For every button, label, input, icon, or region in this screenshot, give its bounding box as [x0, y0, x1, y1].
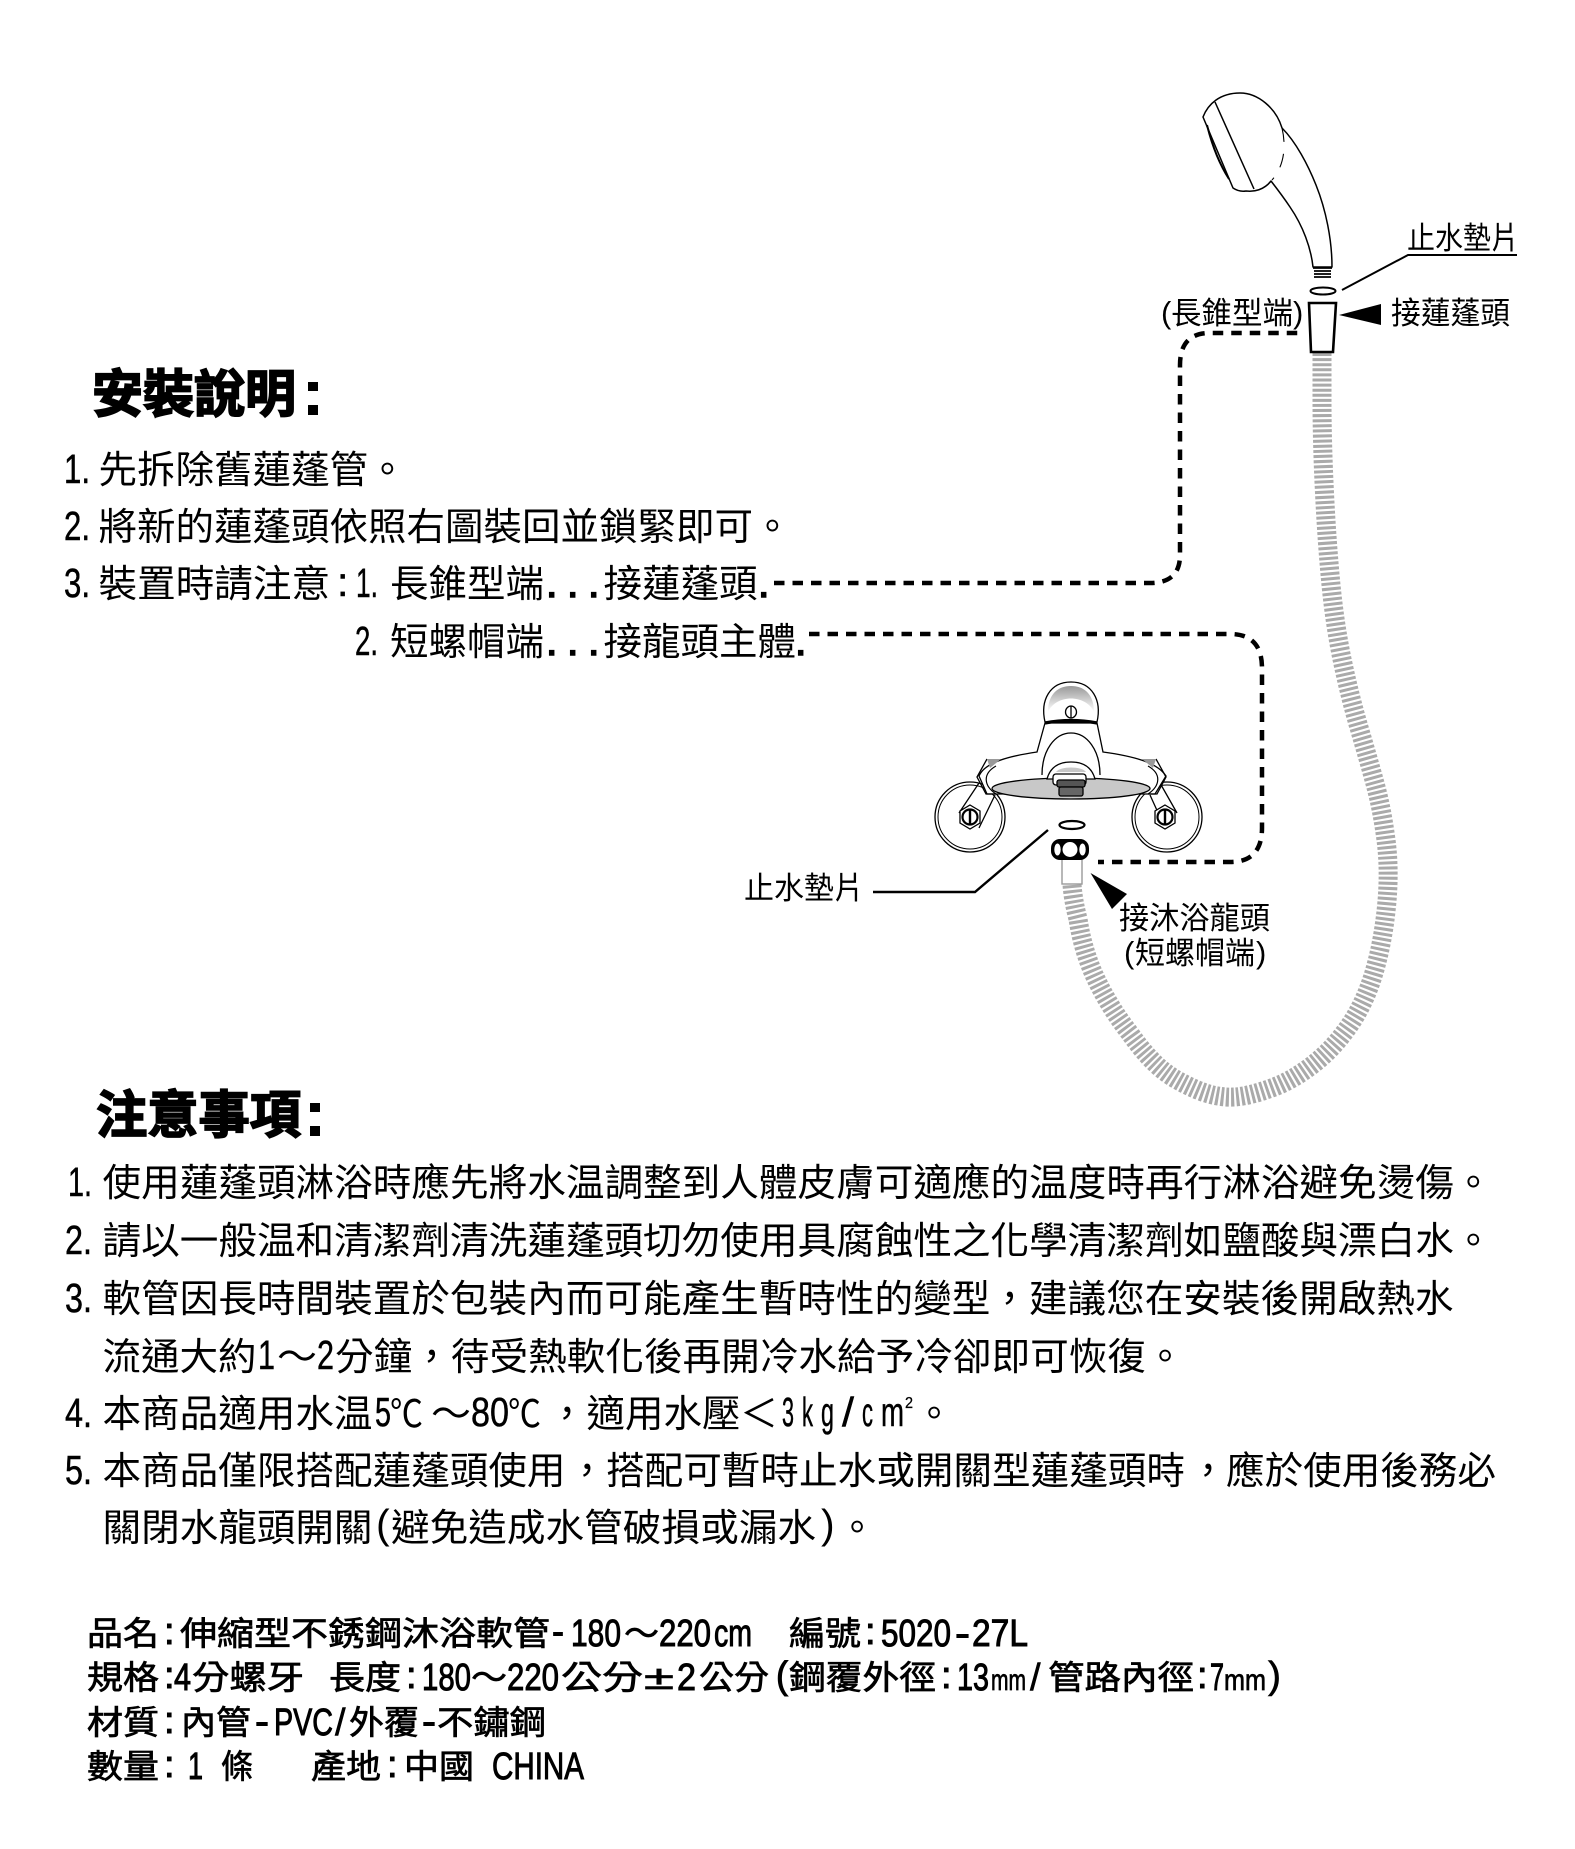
- precaution 4: 2: [905, 1395, 913, 1412]
- spec line: material: [87, 1700, 546, 1744]
- spec line: dimensions: 4: [174, 1657, 191, 1699]
- step 3 long cone end: :: [337, 559, 348, 605]
- precaution 5: ): [821, 1501, 835, 1547]
- precaution 4: 80: [471, 1389, 509, 1435]
- step 3 long cone end: 接蓮蓬頭: [604, 564, 758, 606]
- wheel right: [1132, 782, 1202, 852]
- spec line: dimensions: [87, 1655, 1281, 1699]
- precaution 4: /: [842, 1389, 855, 1435]
- step 3 short nut end: [355, 618, 806, 664]
- precaution 5: 5.: [65, 1447, 92, 1493]
- label: connect bath faucet: 接沐浴龍頭: [1119, 901, 1270, 936]
- spec line: product name and code: cm: [714, 1613, 752, 1655]
- precaution 5: 。: [838, 1508, 876, 1550]
- spec line: dimensions: :: [406, 1655, 417, 1697]
- spec line: dimensions: ～: [471, 1659, 507, 1696]
- spec line: dimensions: 2: [677, 1657, 696, 1699]
- spec line: product name and code: -: [552, 1611, 564, 1653]
- spec line: product name and code: 編號: [789, 1615, 861, 1652]
- precaution 2: 2.: [65, 1217, 92, 1263]
- illustration: short nut connector: [1051, 839, 1089, 884]
- step 3 short nut end: 2.: [355, 618, 378, 664]
- illustration: long cone connector: [1309, 303, 1336, 352]
- text block: precautions: [65, 1159, 1496, 1550]
- spec line: dimensions: 分: [602, 1659, 643, 1696]
- spec line: dimensions: /: [1030, 1657, 1041, 1699]
- spec line: product name and code: 27L: [972, 1613, 1028, 1655]
- precaution 1: 使用蓮蓬頭淋浴時應先將水温調整到人體皮膚可適應的温度時再行淋浴避免燙傷。: [102, 1163, 1492, 1205]
- spec line: product name and code: 伸縮型不銹鋼沐浴軟管: [180, 1615, 550, 1652]
- arrow: to cone connector: [1339, 304, 1381, 325]
- precaution 4: 。: [915, 1394, 953, 1436]
- step 3 long cone end: 3.: [64, 560, 90, 606]
- label: long cone end: (: [1161, 295, 1172, 330]
- step 1: 先拆除舊蓮蓬管。: [98, 450, 406, 492]
- spec line: quantity and origin: CHINA: [492, 1746, 585, 1788]
- precaution 3: 分鐘，待受熱軟化後再開冷水給予冷卻即可恢復: [335, 1337, 1146, 1379]
- step 3 short nut end: 短螺帽端: [390, 622, 544, 664]
- precaution 4: 適用水壓: [586, 1394, 740, 1436]
- text block: installation steps: [64, 446, 806, 664]
- spec line: quantity and origin: 數量: [87, 1748, 159, 1785]
- label: short nut end: 短螺帽端: [1135, 936, 1255, 971]
- spec line: product name and code: ～: [624, 1615, 659, 1652]
- precaution 5: ，: [568, 1451, 606, 1493]
- precaution 5: 本商品僅限搭配蓮蓬頭使用: [102, 1451, 566, 1493]
- spec line: product name and code: :: [164, 1611, 175, 1653]
- spec line: dimensions: 長度: [329, 1659, 401, 1696]
- spec line: dimensions: :: [164, 1655, 175, 1697]
- spec line: dimensions: mm: [991, 1664, 1026, 1697]
- precaution 3: ～: [277, 1337, 317, 1379]
- spec line: quantity and origin: [87, 1744, 585, 1788]
- wheel left: [935, 782, 1005, 852]
- spec line: dimensions: 220: [507, 1657, 559, 1699]
- step 3 short nut end: ...: [546, 618, 599, 664]
- precaution 4: 本商品適用水温: [102, 1394, 372, 1436]
- label: short nut end: (: [1124, 935, 1135, 970]
- small screw: [1066, 706, 1076, 718]
- spec line: dimensions: mm: [1224, 1664, 1266, 1697]
- spec line: quantity and origin: 產地: [311, 1748, 381, 1785]
- step 3 long cone end: 裝置時請注意: [98, 564, 330, 606]
- spec line: material: /: [335, 1702, 346, 1744]
- leader line: bottom gasket label: [873, 830, 1048, 892]
- plate: [992, 778, 1150, 799]
- precaution 4: m: [881, 1389, 904, 1435]
- precaution 5: 應於使用後務必: [1226, 1451, 1496, 1493]
- spec line: material: -: [255, 1701, 269, 1743]
- spec line: product name and code: 180: [571, 1613, 621, 1655]
- spec line: dimensions: 公: [561, 1659, 602, 1696]
- step 2: 2.: [64, 503, 90, 549]
- precaution 4: g: [821, 1389, 834, 1435]
- spec line: dimensions: 180: [422, 1657, 471, 1699]
- precaution 5: 關閉水龍頭開關: [102, 1508, 372, 1550]
- cup: [1047, 762, 1095, 779]
- text block: product specifications: [87, 1611, 1281, 1788]
- precaution 4: k: [802, 1389, 813, 1435]
- step 3 short nut end: 接龍頭主體: [604, 622, 796, 664]
- precaution 4: c: [862, 1389, 873, 1435]
- precaution 3: 3.: [65, 1275, 92, 1321]
- spec line: material: PVC: [274, 1702, 333, 1744]
- spec line: dimensions: 13: [957, 1657, 989, 1699]
- precaution 5: [65, 1447, 1496, 1550]
- spec line: dimensions: ): [1268, 1655, 1281, 1697]
- illustration: top gasket: [1310, 288, 1336, 294]
- precaution 4: 4.: [65, 1390, 92, 1436]
- heading: installation instructions: 安裝說明: [92, 366, 296, 423]
- precaution 5: ，: [1189, 1451, 1227, 1493]
- spec line: material: :: [164, 1700, 175, 1742]
- step 3 short nut end: .: [795, 618, 806, 664]
- spec line: product name and code: :: [865, 1611, 876, 1653]
- step 1: 1.: [64, 446, 90, 492]
- label: short nut end: ): [1256, 935, 1266, 970]
- precaution 4: ＜: [740, 1394, 778, 1436]
- precaution 4: [65, 1389, 953, 1436]
- step 3 long cone end: .: [758, 560, 769, 606]
- step 2: 將新的蓮蓬頭依照右圖裝回並鎖緊即可。: [98, 507, 792, 549]
- spec line: product name and code: 220: [659, 1613, 711, 1655]
- label: long cone end: 長錐型端: [1171, 296, 1293, 331]
- spec line: product name and code: [87, 1611, 1028, 1655]
- inner arch: [1042, 733, 1100, 775]
- precaution 3: 流通大約: [102, 1337, 256, 1379]
- precaution 4: ℃: [508, 1394, 541, 1436]
- precaution 4: 3: [782, 1389, 794, 1435]
- precaution 3: [65, 1275, 1454, 1379]
- spec line: material: 材質: [87, 1704, 159, 1741]
- precaution 3: 。: [1146, 1337, 1184, 1379]
- step 3 long cone end: 1.: [356, 560, 378, 606]
- spec line: dimensions: :: [1197, 1655, 1208, 1697]
- spec line: material: 內管: [181, 1704, 251, 1741]
- label: bottom gasket: 止水墊片: [744, 871, 864, 906]
- spec line: dimensions: 管路內徑: [1048, 1659, 1194, 1696]
- spec line: product name and code: 品名: [87, 1615, 159, 1652]
- precaution 3: 1: [258, 1332, 275, 1378]
- spec line: dimensions: :: [941, 1655, 952, 1697]
- spec line: quantity and origin: 中國: [404, 1748, 474, 1785]
- spec line: quantity and origin: :: [387, 1744, 398, 1786]
- hex corners: [977, 759, 1166, 794]
- spec line: dimensions: 公分: [699, 1659, 769, 1696]
- dashed connector: long cone end to hose top: [774, 333, 1302, 583]
- illustration: bottom gasket: [1060, 821, 1084, 829]
- spec line: product name and code: -: [955, 1613, 970, 1655]
- dome: [1044, 682, 1098, 722]
- illustration: shower head: [1203, 93, 1332, 277]
- spec line: material: 外覆: [349, 1704, 419, 1741]
- precaution 4: ～: [431, 1394, 471, 1436]
- spec line: dimensions: 鋼覆外徑: [789, 1659, 936, 1696]
- precaution 3: 2: [317, 1332, 334, 1378]
- dashed connector: short nut end to faucet: [809, 634, 1262, 862]
- precaution 4: 5: [375, 1389, 391, 1435]
- precaution 4: ，: [548, 1394, 586, 1436]
- spec line: material: 不鏽鋼: [437, 1704, 546, 1741]
- spec line: quantity and origin: :: [164, 1744, 175, 1786]
- precaution 5: (: [376, 1501, 390, 1547]
- step 3 long cone end: ...: [546, 560, 599, 606]
- spec line: material: -: [422, 1701, 436, 1743]
- precaution 2: 請以一般温和清潔劑清洗蓮蓬頭切勿使用具腐蝕性之化學清潔劑如鹽酸與漂白水。: [102, 1221, 1492, 1263]
- arrow: to short nut: [1090, 873, 1127, 909]
- spec line: product name and code: 5020: [881, 1613, 951, 1655]
- spec line: quantity and origin: 1: [188, 1746, 203, 1788]
- spec line: dimensions: 規格: [87, 1659, 159, 1696]
- label: long cone end: ): [1293, 295, 1303, 330]
- spec line: dimensions: 7: [1210, 1657, 1224, 1699]
- illustration: ribbed hose: [1072, 353, 1388, 1097]
- spec line: dimensions: 分螺牙: [192, 1659, 304, 1696]
- leader line: top gasket label: [1342, 255, 1517, 290]
- precaution 5: 避免造成水管破損或漏水: [391, 1508, 816, 1550]
- heading: precautions: 注意事項: [96, 1087, 301, 1144]
- precaution 4: ℃: [390, 1394, 423, 1436]
- precaution 1: 1.: [68, 1159, 92, 1205]
- inner oval arc: [986, 766, 1158, 794]
- precaution 5: 搭配可暫時止水或開關型蓮蓬頭時: [606, 1451, 1185, 1493]
- precaution 3: 軟管因長時間裝置於包裝內而可能產生暫時性的變型，建議您在安裝後開啟熱水: [102, 1279, 1454, 1321]
- spec line: quantity and origin: 條: [221, 1748, 253, 1785]
- label: top gasket: 止水墊片: [1407, 221, 1519, 256]
- step 3 long cone end: 長錐型端: [390, 564, 544, 606]
- step 3 long cone end: [64, 559, 769, 606]
- spec line: dimensions: (: [776, 1655, 788, 1697]
- label: connect shower head: 接蓮蓬頭: [1391, 296, 1510, 331]
- body: [979, 723, 1166, 794]
- illustration: faucet: [935, 682, 1202, 852]
- spec line: dimensions: ±: [644, 1659, 674, 1696]
